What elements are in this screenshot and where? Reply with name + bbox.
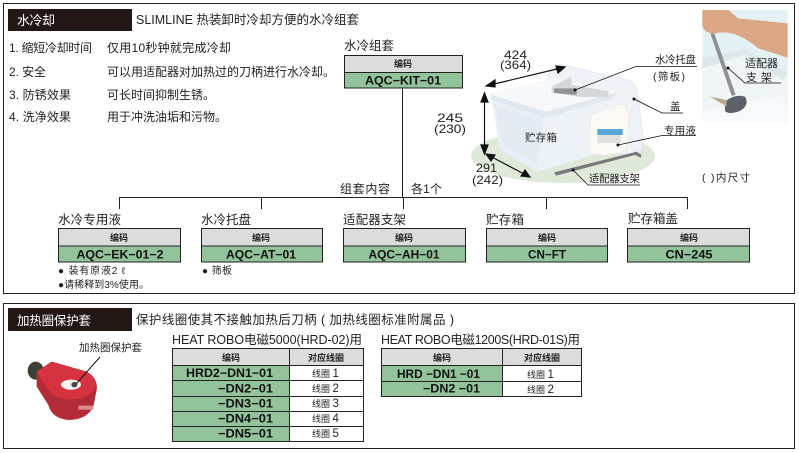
part labels: 水冷托盘 (655, 53, 696, 66)
feature list: 3. 防锈效果 (9, 87, 71, 102)
kit contents label (340, 181, 442, 196)
product: tray (201, 212, 322, 277)
kit table: AQC−KIT−01 (365, 74, 441, 88)
table: HRD-01S coils: 编码 (433, 352, 451, 363)
callout: leader lines (573, 66, 697, 185)
product: tray: 编码 (252, 232, 270, 243)
product: box lid: CN−245 (666, 248, 713, 262)
feature list: 4. 洗净效果 (9, 109, 71, 124)
panel: water cooling (4, 4, 794, 294)
callout: protector label: 加热圈保护套 (79, 341, 142, 354)
table: HRD-02 coils: 线圈 4 (312, 413, 340, 425)
part labels: 专用液 (664, 124, 696, 137)
table: HRD-02 coils: 线圈 1 (312, 368, 339, 380)
table: HRD-02 coils: 线圈 5 (312, 428, 339, 440)
part labels: 盖 (670, 100, 681, 113)
product: liquid: ●请稀释到3%使用。 (58, 278, 149, 291)
kit contents label: 组套内容 (340, 181, 390, 196)
callout: adapter stand label: 适配器 (745, 57, 778, 70)
feature list: 可长时间抑制生锈。 (107, 87, 215, 102)
product: liquid (58, 212, 180, 291)
product: adapter stand: 适配器支架 (343, 213, 406, 227)
photo: red protector (28, 362, 97, 420)
heading: water cooling: 水冷却 (17, 13, 55, 28)
product: adapter stand (343, 213, 466, 262)
subtitle: SLIMLINE 热装卸时冷却方便的水冷组套 (136, 12, 359, 27)
table: HRD-01S coils: 线圈 1 (527, 369, 554, 381)
product: liquid: ● 装有原液2 ℓ (58, 264, 126, 277)
feature list: 仅用10秒钟就完成冷却 (107, 40, 231, 55)
table: HRD-01S coils: 线圈 2 (527, 384, 554, 396)
part labels: 贮存箱 (525, 131, 557, 144)
table: HRD-02 coils: 编码 (222, 352, 240, 363)
product: liquid: 水冷专用液 (58, 212, 121, 227)
product: tray: ● 筛板 (202, 264, 232, 277)
table: HRD-02 coils: 线圈 3 (312, 398, 339, 410)
kit table: 水冷组套 (344, 38, 394, 53)
product: storage box: CN−FT (528, 248, 567, 262)
product: box lid (628, 211, 750, 262)
panel: heating coil protector (4, 304, 794, 448)
dimensions: 291 (476, 161, 497, 175)
table: HRD-02 coils: −DN3−01 (218, 396, 273, 410)
feature list: 1. 缩短冷却时间 (9, 40, 92, 55)
table: HRD-02 coils: −DN5−01 (218, 426, 273, 440)
heading: heating coil protector: 加热圈保护套 (17, 313, 91, 328)
kit table: 编码 (394, 58, 412, 69)
callout: dimension arrows (481, 66, 565, 177)
table: HRD-02 coils: 线圈 2 (312, 383, 339, 395)
dimensions: (242) (472, 173, 503, 187)
product: box lid: 贮存箱盖 (628, 211, 678, 226)
product: tray: AQC−AT−01 (226, 248, 296, 262)
table: HRD-01S coils: HRD −DN1 −01 (397, 367, 480, 381)
part labels: 适配器支架 (589, 173, 640, 185)
product: adapter stand: 编码 (395, 232, 413, 243)
kit contents tree (120, 88, 688, 209)
callout: protector label (76, 341, 142, 384)
table: HRD-01S coils: HEAT ROBO电磁1200S(HRD-01S)用 (381, 332, 580, 347)
heading: heating coil protector (8, 308, 132, 331)
table: HRD-01S coils: −DN2 −01 (423, 382, 480, 396)
kit table (344, 38, 462, 88)
table: HRD-01S coils: 对应线圈 (524, 352, 560, 363)
product: liquid: 编码 (110, 232, 128, 243)
table: HRD-02 coils: −DN4−01 (218, 412, 273, 426)
table: HRD-02 coils: HRD2−DN1−01 (186, 366, 273, 380)
table: HRD-02 coils: −DN2−01 (218, 382, 273, 396)
dimensions: (364) (500, 58, 531, 72)
dimensions: 424 (504, 48, 527, 62)
dimensions: (230) (434, 122, 466, 136)
feature list: 用于冲洗油垢和污物。 (107, 109, 227, 124)
table: HRD-02 coils (172, 332, 364, 442)
callout: adapter stand label: 支架 (746, 71, 772, 84)
product: liquid: AQC−EK−01−2 (76, 248, 164, 262)
heading: water cooling (8, 9, 132, 31)
feature list: 2. 安全 (9, 64, 46, 79)
kit contents label: 各1个 (411, 181, 442, 196)
product: adapter stand: AQC−AH−01 (368, 248, 440, 262)
table: HRD-02 coils: HEAT ROBO电磁5000(HRD-02)用 (172, 332, 362, 347)
callout: adapter stand label (726, 57, 781, 84)
photo: adapter stand in use (702, 10, 788, 122)
product: storage box (486, 212, 608, 262)
product: box lid: 编码 (680, 232, 698, 243)
product: storage box: 编码 (538, 232, 556, 243)
table: HRD-02 coils: 对应线圈 (308, 352, 344, 363)
feature list (9, 40, 335, 124)
feature list: 可以用适配器对加热过的刀柄进行水冷却。 (107, 64, 335, 79)
dimensions (434, 48, 531, 187)
subtitle: 保护线圈使其不接触加热后刀柄 ( 加热线圈标准附属品 ) (136, 312, 454, 327)
table: HRD-01S coils (381, 332, 582, 396)
part labels: ( )内尺寸 (702, 171, 750, 184)
product: storage box: 贮存箱 (486, 212, 524, 227)
part labels: (筛板) (653, 70, 685, 83)
illustration: kit with box, lid, bottle and dimensions (434, 48, 750, 187)
dimensions: 245 (437, 111, 463, 125)
product: tray: 水冷托盘 (201, 212, 251, 227)
part labels (525, 53, 750, 185)
